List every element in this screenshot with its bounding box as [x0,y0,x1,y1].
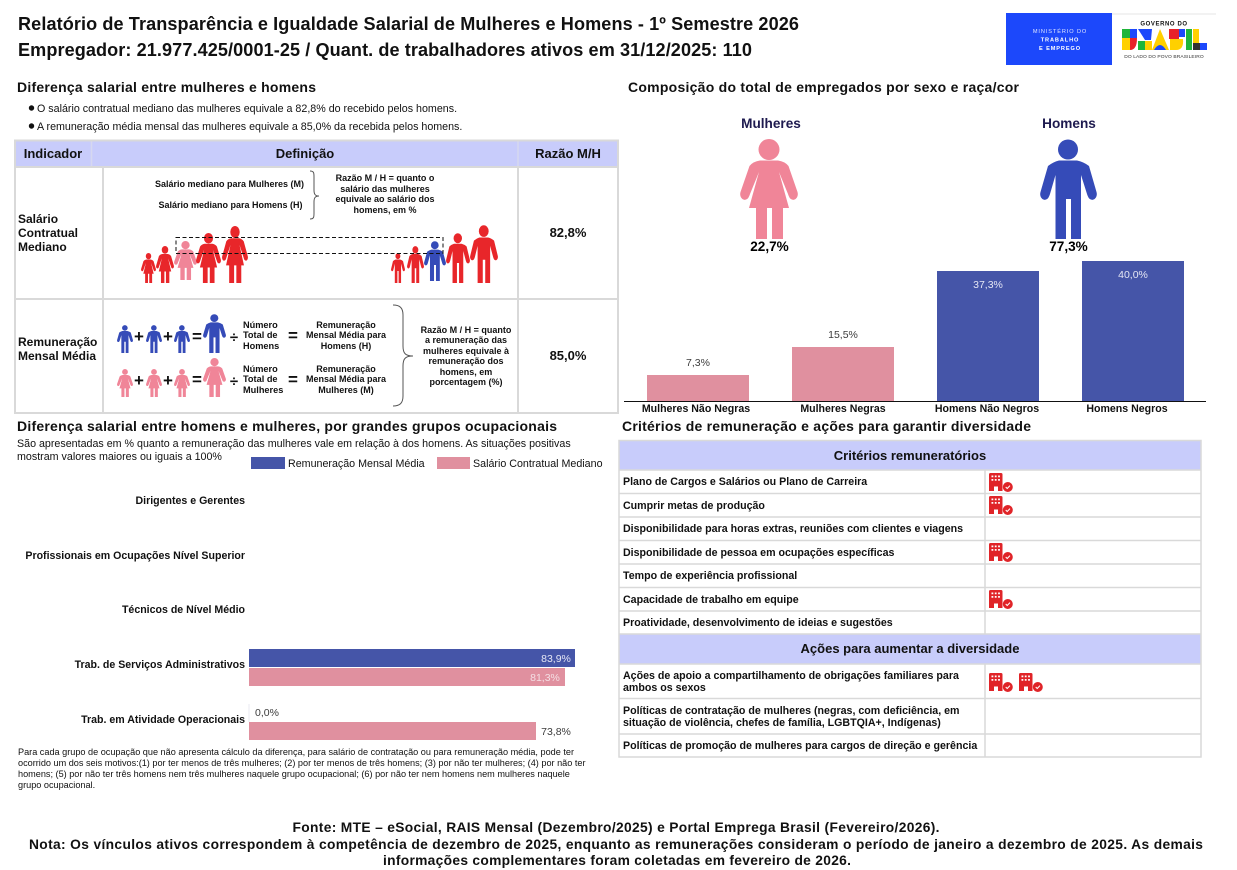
bar chart [624,261,1206,415]
criteria icons [989,473,1013,609]
logo: Governo do Brasil [1112,13,1216,60]
row label: remuneração mensal média: Mensal Média [18,349,96,363]
footer note: Nota: Os vínculos ativos correspondem à competência de dezembro de 2025, enquanto as remunerações consideram o período de janeiro a dezembro de 2025. As demais [29,837,1203,852]
horizontal bar chart: Dirigentes e Gerentes [135,495,245,507]
action rows: situação de violência, chefes de família, LGBTQIA+, Indígenas) [623,717,941,729]
equation: men: + [163,327,173,346]
equation: men: + [134,327,144,346]
definition labels: Salário mediano para Mulheres (M) [155,179,304,189]
equation: women [117,358,387,397]
equation: women: Remuneração [316,364,376,374]
logo: Ministério do Trabalho e Emprego [1006,13,1112,65]
row label: salário contratual mediano: Contratual [18,226,78,240]
footnote: ocorrido um dos seis motivos:(1) por ter menos de três mulheres; (2) por ter menos de três homens; (3) por não ter mulheres; (4) por não ter [18,758,586,768]
action rows: Políticas de promoção de mulheres para cargos de direção e gerência [623,740,977,752]
table header [15,140,618,167]
equation: men: Homens [243,341,279,351]
criteria rows: Plano de Cargos e Salários ou Plano de Carreira [623,476,867,488]
value 85,0%: 85,0% [550,348,587,363]
horizontal bar chart: Técnicos de Nível Médio [122,604,246,616]
definition: razão M/H remuneração: homens, em [440,367,492,377]
equation: men: Total de [243,330,278,340]
bullet: remuneração média: A remuneração média mensal das mulheres equivale a 85,0% da recebida pelos homens. [37,121,462,133]
criteria rows [623,476,963,629]
value: 22,7%: 22,7% [750,239,789,254]
header: critérios remuneratórios: Critérios remuneratórios [834,448,986,463]
horizontal bar chart: 81,3% [530,672,560,684]
equation: men [117,314,387,353]
criteria rows: Capacidade de trabalho em equipe [623,594,799,606]
criteria rows: Disponibilidade de pessoa em ocupações específicas [623,547,895,559]
bar chart: Mulheres Não Negras [642,403,750,415]
header: critérios remuneratórios [619,441,1201,470]
panel: diferença salarial entre mulheres e homens [17,79,462,133]
equation: men: Remuneração [316,320,376,330]
equation: women: Mulheres (M) [318,385,374,395]
action rows: ambos os sexos [623,682,706,694]
title: Empregador: 21.977.425/0001-25 / Quant. de trabalhadores ativos em 31/12/2025: 110 [18,40,752,60]
definition: razão M/H salário: equivale ao salário dos [335,194,435,204]
bar chart: 37,3% [973,279,1003,291]
equation: women: = [192,370,202,389]
logo: Ministério do Trabalho e Emprego: TRABALHO [1041,38,1079,44]
action rows: Políticas de contratação de mulheres (negras, com deficiência, em [623,705,959,717]
horizontal bar chart: 73,8% [541,726,571,738]
equation: men: = [288,326,298,345]
definition: razão M/H salário: Razão M / H = quanto o [336,173,435,183]
icon group: women ordered by salary [141,226,248,283]
table header: Definição [276,146,334,161]
title [18,14,799,60]
equation: women: + [134,371,144,390]
definition: razão M/H remuneração: mulheres equivale à [423,346,510,356]
definition: razão M/H remuneração: porcentagem (%) [429,377,503,387]
equation: men: Número [243,320,278,330]
footer note: Fonte: MTE – eSocial, RAIS Mensal (Dezembro/2025) e Portal Emprega Brasil (Fevereiro/2026). [292,820,940,835]
dashed median highlight [176,238,443,254]
row label: salário contratual mediano: Salário [18,212,58,226]
bar chart: Homens Negros [1086,403,1168,415]
action rows: Ações de apoio a compartilhamento de obrigações familiares para [623,670,959,682]
panel: grupos ocupacionais [17,418,603,790]
panel: tabela de indicadores [15,140,618,413]
footer note [29,820,1203,868]
equation: men: Homens (H) [321,341,371,351]
logo: Governo do Brasil: GOVERNO DO [1140,22,1188,28]
logo: Ministério do Trabalho e Emprego: MINISTÉRIO DO [1033,28,1087,35]
footer note: informações complementares foram coletadas em fevereiro de 2026. [383,853,851,868]
criteria rows: Proatividade, desenvolvimento de ideias e sugestões [623,617,893,629]
definition: razão M/H salário: salário das mulheres [340,184,430,194]
equation: women: Número [243,364,278,374]
definition: razão M/H remuneração: remuneração dos [428,356,504,366]
footnote: grupo ocupacional. [18,780,95,790]
heading: Critérios de remuneração e ações para garantir diversidade [622,418,1031,434]
value: 77,3%: 77,3% [1049,239,1088,254]
equation: women: Total de [243,374,278,384]
horizontal bar chart [25,495,575,740]
bar chart: Mulheres Negras [800,403,886,415]
equation: men: Mensal Média para [306,330,387,340]
value 82,8%: 82,8% [550,225,587,240]
brace [310,171,319,219]
icon group: men ordered by salary [391,225,498,283]
row label: salário contratual mediano: Mediano [18,240,67,254]
equation: women: + [163,371,173,390]
equation: women: ÷ [230,373,238,390]
icon: man [1040,140,1097,239]
bar chart: 40,0% [1118,269,1148,281]
bar chart: Homens Não Negros [935,403,1039,415]
equation: women: Mensal Média para [306,374,387,384]
definition labels: Salário mediano para Homens (H) [158,200,303,210]
brace [393,305,413,406]
label: Homens: Homens [1042,116,1096,131]
description: São apresentadas em % quanto a remuneração das mulheres vale em relação à dos homens. As situações positivas [17,438,571,450]
legend: Remuneração Mensal Média [288,458,425,470]
horizontal bar chart: Trab. em Atividade Operacionais [81,714,245,726]
icon: woman [740,139,798,239]
action rows [623,670,977,752]
horizontal bar chart: Trab. de Serviços Administrativos [75,659,245,671]
horizontal bar chart: 0,0% [255,707,279,719]
heading: Diferença salarial entre homens e mulheres, por grandes grupos ocupacionais [17,418,557,434]
action icons [989,673,1043,692]
header: ações para aumentar a diversidade [619,634,1201,664]
definition: razão M/H salário: homens, em % [353,205,417,215]
legend: Salário Contratual Mediano [473,458,603,470]
table header: Razão M/H [535,146,601,161]
equation: women: Mulheres [243,385,283,395]
equation: men: = [192,327,202,346]
row label: remuneração mensal média: Remuneração [18,335,97,349]
footnote: Para cada grupo de ocupação que não apresenta cálculo da diferença, para salário de contratação ou para remuneração média, pode ter [18,747,574,757]
footnote: homens; (5) por não ter três homens nem três mulheres naquele grupo ocupacional; (6) por não ter nem homens nem mulheres naquele [18,769,570,779]
logo: Ministério do Trabalho e Emprego: E EMPREGO [1039,46,1081,52]
panel: critérios de remuneração e ações [619,418,1201,757]
label: Mulheres: Mulheres [741,116,801,131]
criteria rows: Disponibilidade para horas extras, reuniões com clientes e viagens [623,523,963,535]
horizontal bar chart: 83,9% [541,653,571,665]
definition: razão M/H remuneração: Razão M / H = quanto [421,325,512,335]
horizontal bar chart: Profissionais em Ocupações Nível Superior [25,550,245,562]
logo: Governo do Brasil: DO LADO DO POVO BRASILEIRO [1124,54,1204,60]
heading: Composição do total de empregados por sexo e raça/cor [628,79,1020,95]
bullet: salário contratual: O salário contratual mediano das mulheres equivale a 82,8% do recebido pelos homens. [37,103,457,115]
bar chart: 7,3% [686,357,710,369]
criteria rows: Cumprir metas de produção [623,500,765,512]
definition labels [155,179,304,210]
bar chart: 15,5% [828,329,858,341]
heading: Diferença salarial entre mulheres e homens [17,79,316,95]
equation: men: ÷ [230,329,238,346]
legend [251,457,603,470]
criteria rows: Tempo de experiência profissional [623,570,797,582]
panel: composição do total de empregados [624,79,1206,415]
equation: women: = [288,370,298,389]
title: Relatório de Transparência e Igualdade Salarial de Mulheres e Homens - 1º Semestre 2026 [18,14,799,34]
definition: razão M/H remuneração: a remuneração das [425,335,507,345]
table header: Indicador [24,146,82,161]
header: ações para aumentar a diversidade: Ações para aumentar a diversidade [801,641,1019,656]
description: mostram valores maiores ou iguais a 100% [17,451,222,463]
